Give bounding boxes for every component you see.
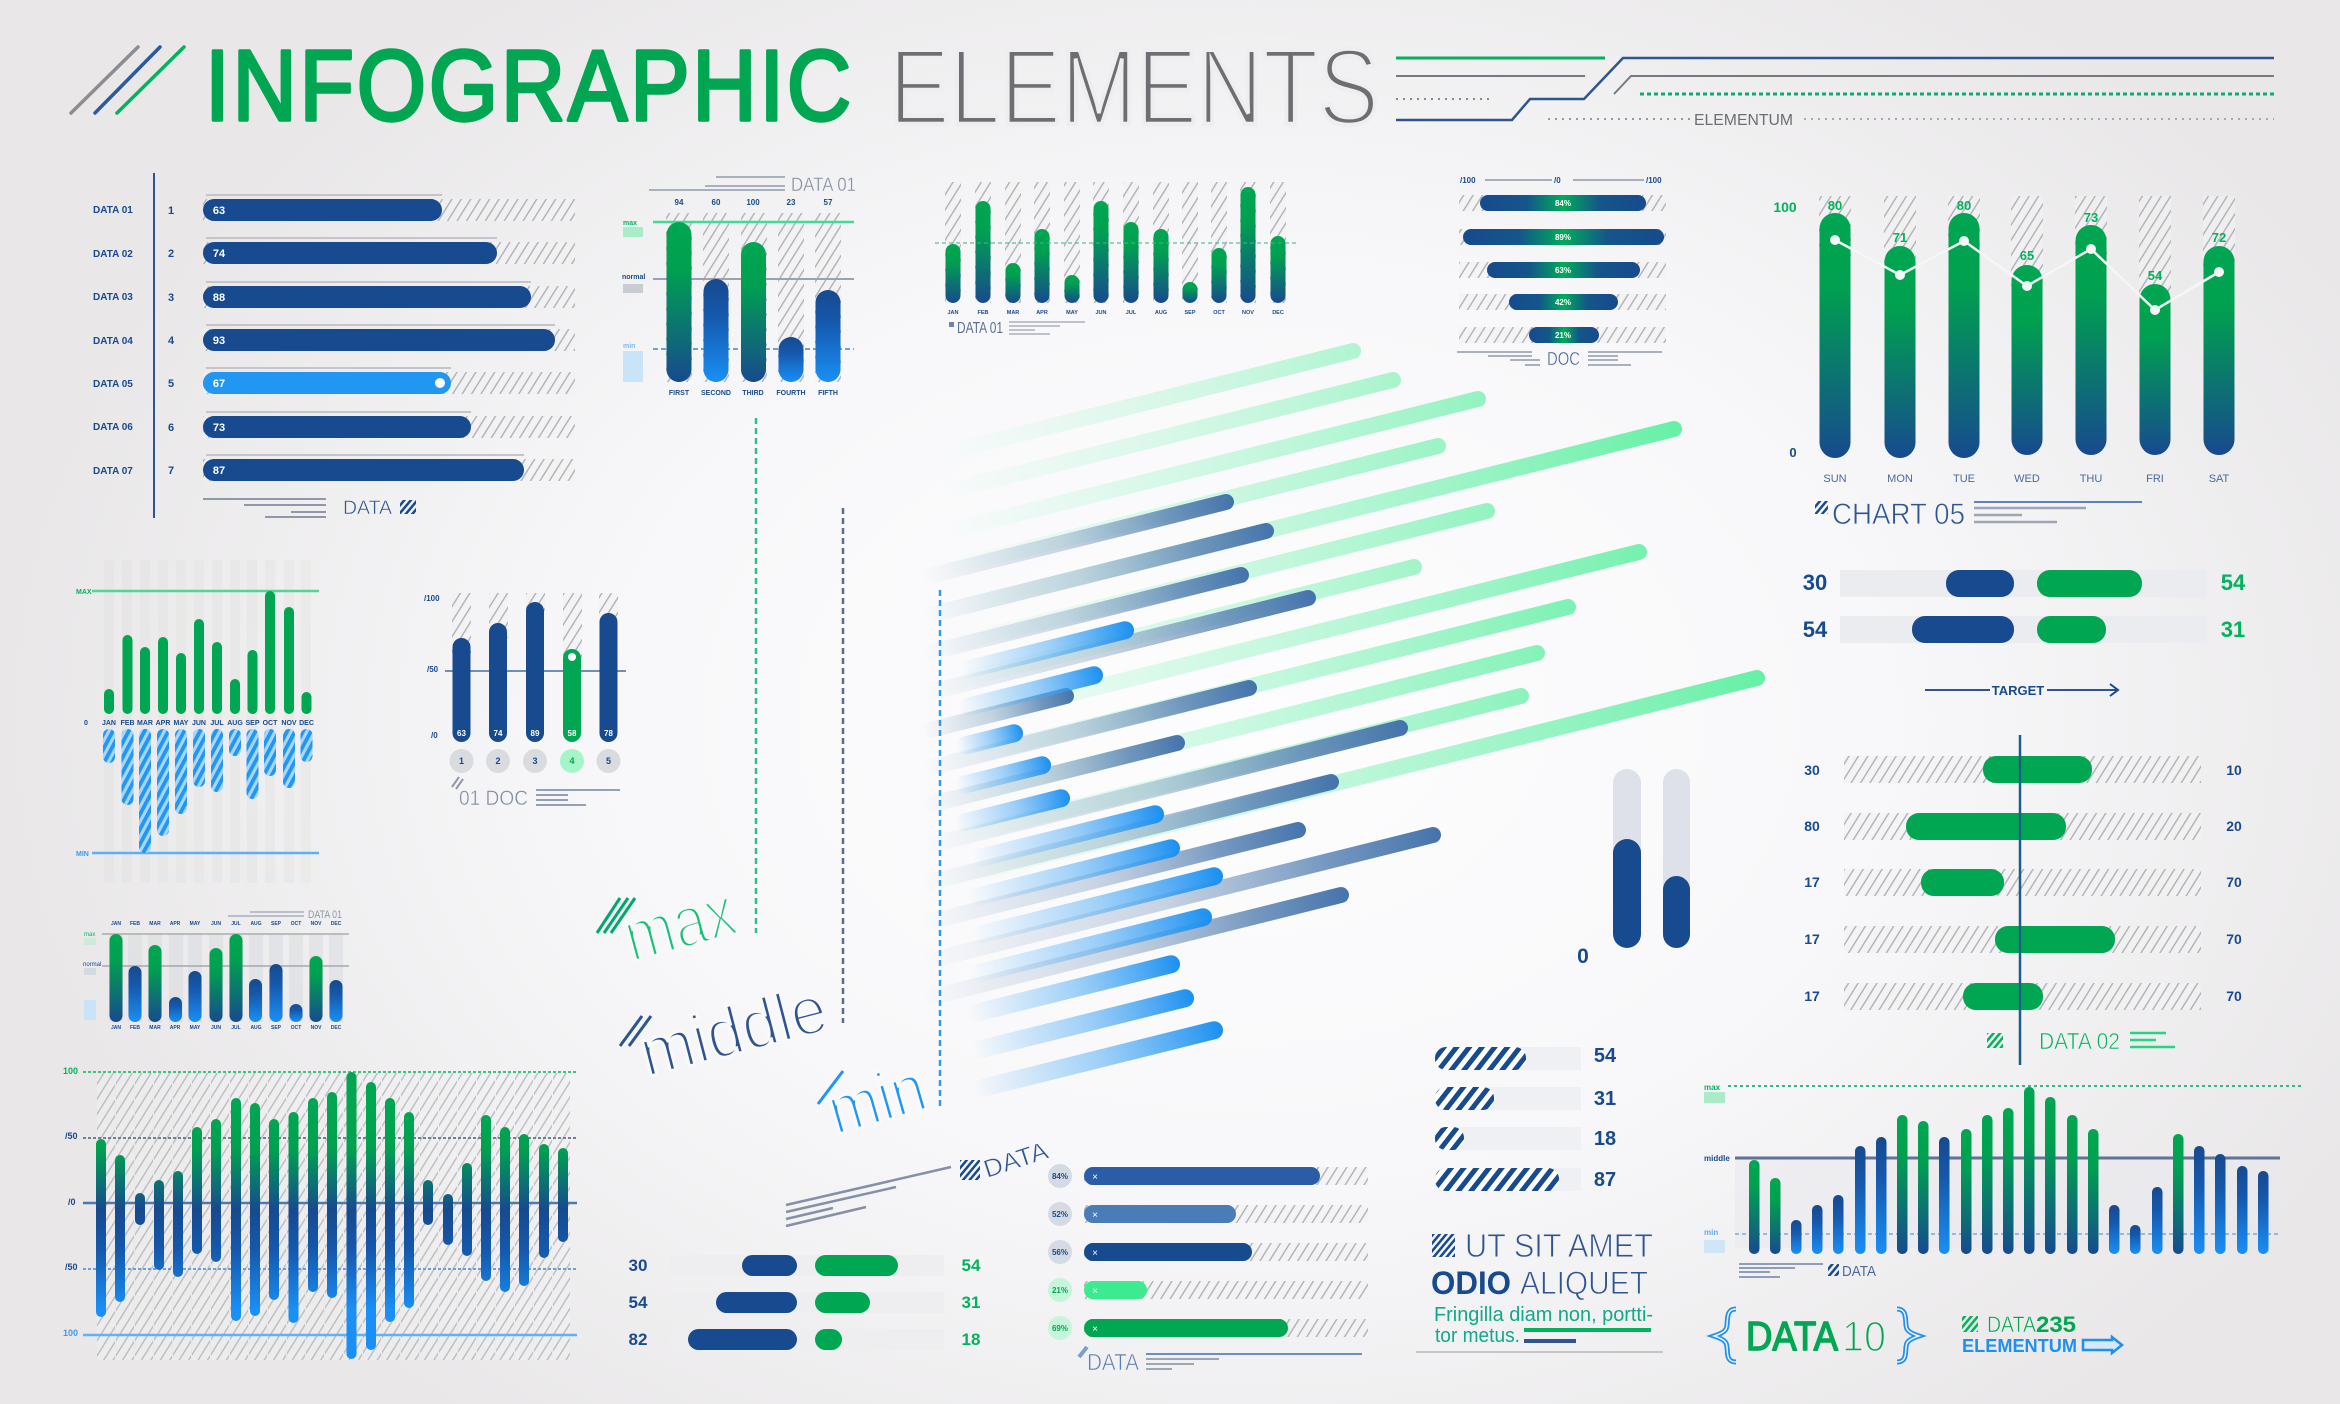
panel: five-bar chart 01 DOC: /100 — [424, 594, 440, 603]
panel: DATA 02 range bars — [1804, 735, 2242, 1065]
panel: small twelve-bar chart: MAR — [149, 921, 161, 927]
panel: CHART 05 weekly bars: 54 — [2148, 268, 2163, 283]
panel: five-bar chart DATA 01: SECOND — [701, 390, 731, 397]
caption: 01 DOC — [459, 787, 528, 810]
panel: horizontal data bars: 87 — [213, 465, 225, 477]
caption — [1079, 1347, 1362, 1375]
caption — [1739, 1263, 1876, 1280]
axis legend: max — [623, 220, 637, 227]
axis legend — [622, 220, 645, 382]
panel: big positive negative chart: 100 — [63, 1328, 78, 1338]
panel: diverging bars top right: 31 — [2221, 617, 2245, 642]
panel: up and down monthly chart: JUL — [210, 720, 224, 727]
slanted DATA caption: DATA — [980, 1137, 1052, 1184]
panel: bottom right chart: middle — [1704, 1154, 1730, 1163]
panel: small twelve-bar chart: NOV — [311, 1025, 322, 1031]
panel: big positive negative chart: /50 — [65, 1262, 78, 1272]
panel: horizontal data bars: 63 — [213, 205, 225, 217]
panel: CHART 05 weekly bars: MON — [1887, 473, 1913, 485]
text block: Ut sit amet: tor metus. — [1435, 1325, 1520, 1347]
panel: five-bar chart DATA 01: FOURTH — [776, 390, 806, 397]
panel: horizontal data bars: 3 — [168, 292, 174, 304]
panel: CHART 05 weekly bars: SAT — [2209, 473, 2230, 485]
panel: CHART 05 weekly bars — [1773, 196, 2235, 531]
number circles: 5 — [606, 756, 611, 766]
panel: DOC funnel bars: 21% — [1555, 331, 1571, 340]
panel: horizontal data bars: 74 — [213, 248, 226, 260]
slanted DATA caption — [786, 1137, 1052, 1226]
panel: twelve-month chart — [935, 182, 1298, 337]
panel: percent progress bars: × — [1092, 1286, 1098, 1297]
panel: horizontal data bars: 88 — [213, 292, 225, 304]
panel: diverging bars top right — [1803, 570, 2246, 643]
caption: CHART 05 — [1832, 498, 1965, 531]
panel: five-bar chart 01 DOC: 78 — [604, 729, 613, 738]
panel: CHART 05 weekly bars: WED — [2014, 473, 2040, 485]
panel: bottom right chart — [1704, 1083, 2301, 1280]
reference lines — [83, 1072, 577, 1335]
caption: DATA — [1087, 1349, 1140, 1375]
panel: bottom diverging bars — [629, 1255, 981, 1350]
panel: CHART 05 weekly bars: 65 — [2020, 248, 2034, 263]
header lines with ELEMENTUM: ELEMENTUM — [1694, 112, 1793, 129]
panel: DATA 02 range bars: 17 — [1804, 931, 1820, 947]
panel: diverging bars top right: 54 — [2221, 570, 2246, 595]
number circles: 3 — [532, 756, 538, 766]
panel: small twelve-bar chart: OCT — [291, 1025, 301, 1031]
panel: big positive negative chart: 100 — [63, 1066, 78, 1076]
row labels: DATA 07 — [93, 466, 133, 477]
panel: small twelve-bar chart: DATA 01 — [308, 909, 342, 921]
panel: five-bar chart DATA 01: 23 — [787, 198, 796, 207]
text block: Ut sit amet: Fringilla diam non, portti- — [1434, 1304, 1653, 1326]
panel: DOC funnel bars: 84% — [1555, 199, 1571, 208]
panel: twelve-month chart: NOV — [1242, 310, 1254, 316]
panel: up and down monthly chart: AUG — [227, 720, 243, 727]
panel: DOC funnel bars: /100 — [1646, 176, 1662, 185]
label: max: max — [615, 871, 744, 977]
panel: small twelve-bar chart: max — [84, 932, 95, 938]
panel: CHART 05 weekly bars: 71 — [1893, 230, 1907, 245]
text block: Ut sit amet — [1416, 1227, 1663, 1352]
panel: up and down monthly chart: MAY — [174, 720, 189, 727]
panel: five-bar chart 01 DOC: 89 — [531, 729, 540, 738]
panel: five-bar chart DATA 01: 94 — [675, 198, 684, 207]
panel: bottom diverging bars: 54 — [962, 1256, 981, 1275]
bars — [1084, 1167, 1320, 1337]
bars — [203, 199, 555, 481]
panel: DATA 02 range bars: 30 — [1804, 762, 1820, 778]
panel: small twelve-bar chart: AUG — [250, 1025, 262, 1031]
panel: twelve-month chart: SEP — [1184, 310, 1196, 316]
panel: small twelve-bar chart: MAR — [149, 1025, 161, 1031]
panel: small twelve-bar chart: JAN — [111, 921, 121, 927]
badge: DATA10: 10 — [1842, 1313, 1886, 1361]
row labels: DATA 02 — [93, 249, 133, 260]
panel: twelve-month chart: MAR — [1007, 310, 1019, 316]
panel: five-bar chart DATA 01: FIFTH — [818, 390, 838, 397]
panel: small twelve-bar chart: normal — [83, 962, 101, 968]
panel: twelve-month chart: OCT — [1213, 310, 1225, 316]
panel: slanted bars — [920, 341, 1767, 1099]
panel: small twelve-bar chart: JUL — [231, 921, 241, 927]
panel: small twelve-bar chart: APR — [170, 1025, 181, 1031]
panel: up and down monthly chart: APR — [156, 720, 170, 727]
panel: small twelve-bar chart: MAY — [190, 921, 201, 927]
panel: CHART 05 weekly bars: 0 — [1789, 445, 1797, 460]
panel: up and down monthly chart: NOV — [281, 720, 297, 727]
panel: horizontal data bars: 7 — [168, 465, 174, 477]
twin vertical gauges — [1577, 769, 1690, 968]
panel: five-bar chart DATA 01 — [622, 175, 856, 397]
hatched blue bars — [103, 729, 312, 853]
panel: horizontal data bars: 2 — [168, 248, 174, 260]
panel: small twelve-bar chart: APR — [170, 921, 181, 927]
panel: up and down monthly chart: SEP — [245, 720, 260, 727]
label: middle: middle — [632, 970, 835, 1092]
panel: DATA 02 range bars: 20 — [2226, 818, 2242, 834]
bars — [96, 1072, 568, 1359]
panel: horizontal data bars: 93 — [213, 335, 225, 347]
panel: CHART 05 weekly bars: 80 — [1828, 198, 1842, 213]
caption: DATA — [1842, 1263, 1876, 1280]
navy segments — [920, 492, 1443, 1007]
line overlay — [1830, 235, 2224, 315]
panel: DOC funnel bars: 63% — [1555, 266, 1571, 275]
panel: big positive negative chart: /0 — [68, 1197, 76, 1207]
panel: small twelve-bar chart: AUG — [250, 921, 262, 927]
panel: CHART 05 weekly bars: 73 — [2084, 210, 2098, 225]
title: INFOGRAPHIC — [205, 30, 854, 142]
panel: DOC funnel bars — [1457, 176, 1666, 369]
green segments — [940, 341, 1767, 889]
panel: horizontal data bars: 1 — [168, 205, 174, 217]
panel: percent progress bars: × — [1092, 1248, 1098, 1259]
panel: five-bar chart DATA 01: 100 — [746, 198, 760, 207]
panel: up and down monthly chart: JUN — [192, 720, 206, 727]
panel: small twelve-bar chart: SEP — [271, 921, 282, 927]
panel: twelve-month chart: DEC — [1272, 310, 1284, 316]
percent badges — [1048, 1164, 1072, 1340]
panel: DOC funnel bars: /100 — [1460, 176, 1476, 185]
panel: CHART 05 weekly bars: 80 — [1957, 198, 1971, 213]
panel: DATA 02 range bars: 80 — [1804, 818, 1820, 834]
text block: Ut sit amet: ALIQUET — [1520, 1265, 1648, 1301]
bars — [946, 187, 1286, 303]
icon: right brace — [1897, 1309, 1919, 1362]
panel: twelve-month chart: JAN — [947, 310, 959, 316]
row labels: DATA 01 — [93, 205, 133, 216]
bars — [1912, 570, 2142, 643]
panel: bottom diverging bars: 54 — [629, 1293, 648, 1312]
blue segments — [953, 619, 1225, 1099]
panel: bottom right chart: max — [1704, 1083, 1721, 1092]
panel: horizontal data bars: 6 — [168, 422, 174, 434]
dashed scale lines — [756, 418, 940, 1108]
panel: up and down monthly chart: 0 — [84, 720, 88, 727]
panel: bottom diverging bars: 18 — [962, 1330, 980, 1349]
panel: small twelve-bar chart: JUN — [211, 921, 221, 927]
panel: CHART 05 weekly bars: 72 — [2212, 230, 2226, 245]
axis legend: min — [623, 343, 635, 350]
header lines with ELEMENTUM — [1396, 58, 2274, 129]
panel: bottom diverging bars: 82 — [629, 1330, 647, 1349]
panel: small twelve-bar chart: JUL — [231, 1025, 241, 1031]
number circles: 4 — [569, 756, 575, 766]
panel: five-bar chart DATA 01: DATA 01 — [791, 175, 856, 196]
panel: percent progress bars — [1048, 1164, 1368, 1375]
panel: horizontal data bars: 5 — [168, 378, 174, 390]
percent badges: 52% — [1052, 1210, 1068, 1219]
row labels: DATA 06 — [93, 422, 133, 433]
panel: small twelve-bar chart: JUN — [211, 1025, 221, 1031]
percent badges: 21% — [1052, 1286, 1068, 1295]
percent badges: 69% — [1052, 1324, 1068, 1333]
panel: five-bar chart 01 DOC: /0 — [431, 731, 438, 740]
panel: CHART 05 weekly bars: 100 — [1773, 199, 1797, 215]
footer DATA: DATA — [343, 498, 392, 519]
panel: bottom diverging bars: 30 — [629, 1256, 647, 1275]
title — [71, 26, 1379, 147]
badge: DATA10: DATA — [1746, 1313, 1839, 1359]
panel: hatched pill bars — [1435, 1045, 1617, 1191]
panel: diverging bars top right: 54 — [1803, 617, 1828, 642]
axis legend: normal — [622, 274, 645, 281]
row labels: DATA 03 — [93, 292, 133, 303]
percent badges: 84% — [1052, 1172, 1068, 1181]
bars — [1749, 1087, 2268, 1254]
panel: small twelve-bar chart: OCT — [291, 921, 301, 927]
caption — [1987, 1028, 2175, 1054]
panel: CHART 05 weekly bars: TUE — [1953, 473, 1975, 485]
title slashes — [71, 47, 184, 113]
percent badges: 56% — [1052, 1248, 1068, 1257]
panel: small twelve-bar chart: NOV — [311, 921, 322, 927]
panel: DOC funnel bars: /0 — [1554, 176, 1561, 185]
panel: twelve-month chart: FEB — [978, 310, 989, 316]
panel: five-bar chart 01 DOC — [424, 593, 626, 810]
footer DATA — [203, 498, 416, 519]
text block: Ut sit amet: ODIO — [1431, 1265, 1511, 1301]
panel: small twelve-bar chart — [83, 909, 349, 1031]
panel: diverging bars top right: 30 — [1803, 570, 1827, 595]
row labels: DATA 05 — [93, 379, 133, 390]
panel: CHART 05 weekly bars: SUN — [1823, 473, 1847, 485]
panel: DATA 02 range bars: 70 — [2226, 988, 2242, 1004]
badge: DATA235 ELEMENTUM — [1962, 1312, 2122, 1356]
panel: hatched pill bars: 87 — [1594, 1169, 1616, 1191]
panel: hatched pill bars: 18 — [1594, 1128, 1616, 1150]
panel: bottom right chart: min — [1704, 1228, 1718, 1237]
panel: big positive negative chart: /50 — [65, 1131, 78, 1141]
panel: five-bar chart 01 DOC: 63 — [457, 729, 466, 738]
bars — [1906, 756, 2115, 1010]
panel: hatched pill bars: 54 — [1594, 1045, 1617, 1067]
panel: small twelve-bar chart: DEC — [331, 921, 342, 927]
label: min: min — [819, 1049, 934, 1149]
bars — [452, 602, 618, 742]
bars — [110, 934, 342, 1022]
arrow: target — [1925, 683, 2118, 698]
panel: five-bar chart 01 DOC: 74 — [494, 729, 503, 738]
badge: DATA235 ELEMENTUM: ELEMENTUM — [1962, 1336, 2077, 1356]
bars — [1820, 213, 2234, 458]
panel: DATA 02 range bars: 70 — [2226, 874, 2242, 890]
panel: up and down monthly chart: DEC — [299, 720, 314, 727]
caption — [452, 777, 620, 810]
panel: DATA 02 range bars: 17 — [1804, 874, 1820, 890]
number circles: 1 — [459, 756, 464, 766]
panel: percent progress bars: × — [1092, 1324, 1098, 1335]
panel: twelve-month chart: APR — [1036, 310, 1048, 316]
title: ELEMENTS — [889, 26, 1379, 147]
panel: DATA 02 range bars: 10 — [2226, 762, 2242, 778]
panel: up and down monthly chart: OCT — [263, 720, 278, 727]
panel: small twelve-bar chart: DEC — [331, 1025, 342, 1031]
panel: twelve-month chart: AUG — [1155, 310, 1167, 316]
panel: horizontal data bars: 67 — [213, 378, 225, 390]
panel: five-bar chart DATA 01: 57 — [824, 198, 833, 207]
twin vertical gauges: 0 — [1577, 945, 1589, 968]
text block: Ut sit amet: UT SIT AMET — [1465, 1227, 1653, 1264]
caption: DATA 02 — [2039, 1028, 2120, 1054]
badge: DATA10 — [1714, 1309, 1919, 1362]
panel: five-bar chart DATA 01: 60 — [712, 198, 721, 207]
badge: DATA235 ELEMENTUM: 235 — [2036, 1312, 2076, 1337]
panel: up and down monthly chart: MAR — [137, 720, 153, 727]
panel: bottom diverging bars: 31 — [962, 1293, 980, 1312]
panel: percent progress bars: × — [1092, 1172, 1098, 1183]
caption — [1815, 498, 2142, 531]
panel: big positive negative chart — [63, 1066, 577, 1360]
panel: up and down monthly chart: MAX — [76, 589, 92, 596]
bars — [1463, 195, 1664, 343]
panel: DATA 02 range bars: 70 — [2226, 931, 2242, 947]
green bars — [104, 591, 312, 714]
panel: small twelve-bar chart: MAY — [190, 1025, 201, 1031]
panel: twelve-month chart: JUL — [1126, 310, 1137, 316]
panel: percent progress bars: × — [1092, 1210, 1098, 1221]
panel: five-bar chart 01 DOC: /50 — [427, 665, 439, 674]
panel: small twelve-bar chart: FEB — [130, 921, 140, 927]
panel: DOC funnel bars: 42% — [1555, 298, 1571, 307]
panel: horizontal data bars: 4 — [168, 335, 175, 347]
number circles: 2 — [495, 756, 501, 766]
badge: DATA235 ELEMENTUM: DATA — [1987, 1312, 2036, 1337]
panel: up and down monthly chart: MIN — [76, 851, 89, 858]
arrow: target: TARGET — [1992, 683, 2044, 698]
row labels: DATA 04 — [93, 336, 133, 347]
caption — [949, 320, 1085, 337]
panel: DATA 02 range bars: 17 — [1804, 988, 1820, 1004]
panel: DOC funnel bars: 89% — [1555, 233, 1571, 242]
panel: twelve-month chart: MAY — [1066, 310, 1078, 316]
panel: small twelve-bar chart: JAN — [111, 1025, 121, 1031]
caption: DATA 01 — [957, 320, 1003, 337]
panel: CHART 05 weekly bars: THU — [2080, 473, 2102, 485]
panel: five-bar chart DATA 01: FIRST — [669, 390, 690, 397]
hatch tracks — [203, 199, 575, 481]
panel: five-bar chart DATA 01: THIRD — [742, 390, 764, 397]
panel: up and down monthly chart — [76, 560, 319, 883]
panel: five-bar chart 01 DOC: 58 — [568, 729, 577, 738]
panel: hatched pill bars: 31 — [1594, 1088, 1616, 1110]
panel: CHART 05 weekly bars: FRI — [2146, 473, 2164, 485]
number circles — [450, 749, 620, 773]
icon: left brace — [1714, 1309, 1736, 1362]
row labels — [93, 205, 133, 477]
panel: small twelve-bar chart: SEP — [271, 1025, 282, 1031]
bars — [666, 222, 840, 382]
panel: horizontal data bars: 73 — [213, 422, 225, 434]
panel: up and down monthly chart: JAN — [102, 720, 116, 727]
caption: DOC — [1547, 349, 1580, 369]
panel: up and down monthly chart: FEB — [120, 720, 134, 727]
panel: horizontal data bars — [93, 173, 575, 519]
panel: small twelve-bar chart: FEB — [130, 1025, 140, 1031]
panel: twelve-month chart: JUN — [1095, 310, 1107, 316]
